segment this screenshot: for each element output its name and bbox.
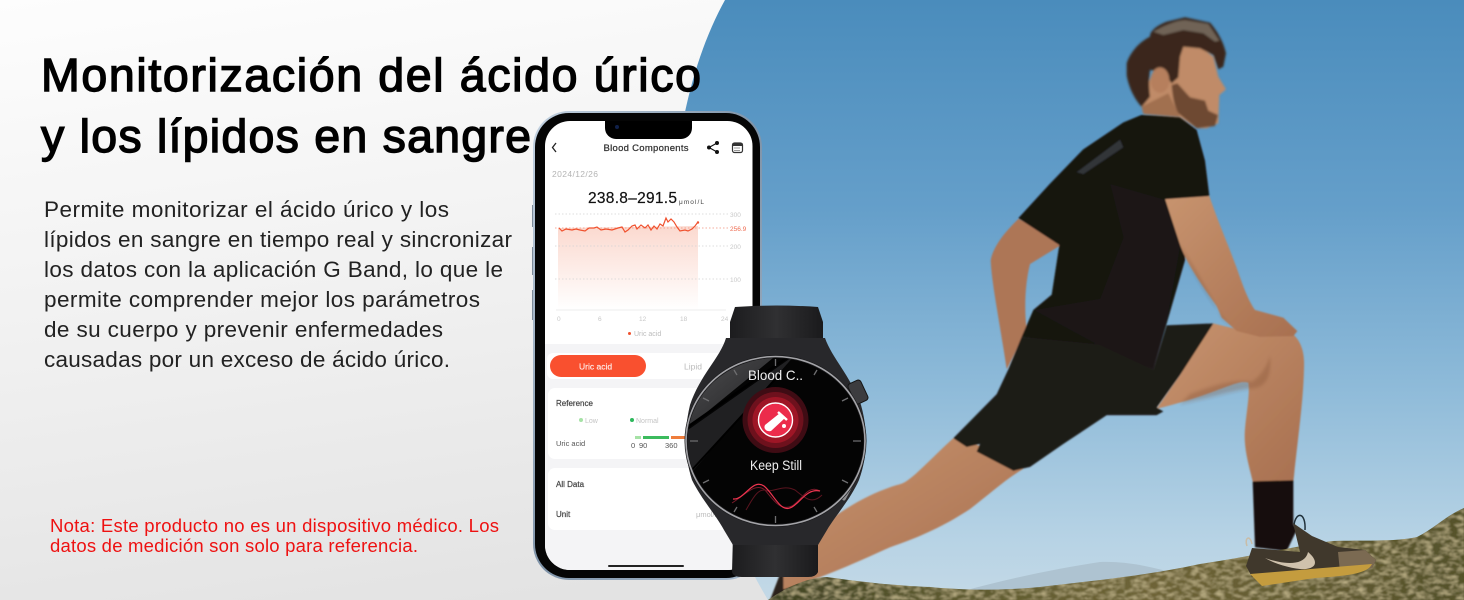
- sock: [1253, 480, 1297, 551]
- medical disclaimer note: [50, 515, 499, 556]
- shoe lace loop: [1294, 515, 1305, 530]
- phone screen: [545, 121, 752, 570]
- hair highlight: [1153, 20, 1219, 42]
- app header: [552, 142, 742, 154]
- reference card: 360: [665, 441, 678, 450]
- medical disclaimer note: Nota: Este producto no es un dispositivo médico. Los: [50, 515, 499, 536]
- crown: [847, 379, 869, 405]
- front arm: [1165, 196, 1297, 337]
- shoe swoosh: [1265, 552, 1315, 569]
- leg shading: [1180, 356, 1270, 404]
- tab selector: Uric acid: [579, 362, 612, 372]
- bottom band: [732, 535, 818, 577]
- body description: permite comprender mejor los parámetros: [44, 287, 480, 312]
- phone side buttons: [532, 205, 534, 320]
- home indicator: [608, 565, 684, 567]
- app header: Blood Components: [604, 143, 689, 154]
- hair: [1127, 17, 1226, 107]
- watch lugs: [686, 338, 866, 545]
- shoe toe: [1338, 550, 1376, 572]
- all data card: Unit: [556, 510, 571, 519]
- shoe upper: [1246, 523, 1376, 577]
- measuring label: Blood C..: [748, 367, 803, 383]
- body description: los datos con la aplicación G Band, lo que le: [44, 257, 503, 282]
- uric acid chart: 200: [730, 244, 741, 251]
- camera: [615, 125, 619, 129]
- title: [41, 49, 701, 162]
- all data card: [548, 468, 752, 530]
- reading value: 238.8–291.5: [588, 190, 677, 207]
- blood test icon: [742, 387, 808, 453]
- reference card: 0: [631, 441, 635, 450]
- reference card: Uric acid: [556, 439, 585, 448]
- uric acid chart: Uric acid: [634, 331, 661, 338]
- uric acid chart: 18: [680, 316, 688, 323]
- reference card: Normal: [636, 418, 659, 425]
- uric acid chart: [555, 212, 747, 338]
- neck shade: [1142, 93, 1180, 117]
- body description: de su cuerpo y prevenir enfermedades: [44, 317, 443, 342]
- back foot: [770, 572, 810, 600]
- ear: [1151, 67, 1169, 93]
- reference card: [548, 388, 752, 459]
- pulse waves: [732, 484, 822, 510]
- all data card: All Data: [556, 480, 585, 489]
- uric acid chart: 100: [730, 277, 741, 284]
- front leg: [1157, 323, 1304, 481]
- reference card: Reference: [556, 399, 593, 408]
- bezel ring: [686, 356, 865, 526]
- man head: [1127, 17, 1226, 128]
- heel loop: [1246, 538, 1252, 546]
- medical disclaimer note: datos de medición son solo para referencia.: [50, 535, 418, 556]
- sky photo panel: [673, 0, 1464, 600]
- side button: [841, 473, 859, 501]
- uric acid chart: 256.9: [730, 226, 747, 233]
- reference card: Low: [585, 418, 599, 425]
- date: 2024/12/26: [552, 169, 598, 179]
- back leg: [783, 438, 1023, 589]
- uric acid chart: 24: [721, 316, 729, 323]
- status label: Keep Still: [750, 458, 802, 473]
- beard: [1172, 83, 1218, 128]
- shirt print: [1077, 140, 1123, 174]
- uric acid chart: 0: [738, 308, 742, 315]
- neck and face: [1142, 47, 1226, 128]
- phone bezel: [535, 113, 760, 578]
- notch: [605, 121, 692, 139]
- grassy hill: [768, 508, 1464, 600]
- running shoe: [1246, 515, 1376, 586]
- smartphone: [532, 111, 762, 580]
- body description: lípidos en sangre en tiempo real y sincronizar: [44, 227, 512, 252]
- all data card: μmol/L: [696, 510, 719, 519]
- shirt side panel: [1033, 184, 1183, 369]
- shirt: [1018, 115, 1209, 369]
- title: Monitorización del ácido úrico: [41, 49, 701, 101]
- reading value: μmol/L: [679, 199, 704, 206]
- lower screen background: [545, 344, 752, 570]
- watch display: [688, 358, 864, 524]
- top band: [730, 306, 823, 352]
- back arm: [991, 219, 1060, 369]
- tab selector: [547, 353, 752, 379]
- calendar icon: [732, 143, 742, 152]
- uric acid chart: 6: [598, 316, 602, 323]
- shoe sole: [1250, 564, 1372, 586]
- phone frame: [533, 111, 762, 580]
- arm shading: [1180, 245, 1233, 330]
- tab selector: Lipid: [684, 362, 702, 372]
- bezel ticks: [690, 359, 861, 523]
- uric acid chart: 12: [639, 316, 647, 323]
- glass reflection: [688, 358, 791, 470]
- reference card: 90: [639, 441, 647, 450]
- body description: [44, 197, 512, 372]
- title: y los lípidos en sangre: [41, 110, 531, 162]
- body description: causadas por un exceso de ácido úrico.: [44, 347, 450, 372]
- man back leg and torso: [770, 115, 1304, 600]
- watch case: [684, 355, 866, 527]
- smartwatch: [680, 306, 869, 577]
- share icon: [708, 142, 718, 154]
- uric acid chart: 0: [557, 316, 561, 323]
- shorts: [953, 323, 1213, 471]
- body description: Permite monitorizar el ácido úrico y los: [44, 197, 449, 222]
- distant hills: [960, 562, 1180, 600]
- uric acid chart: 300: [730, 212, 741, 219]
